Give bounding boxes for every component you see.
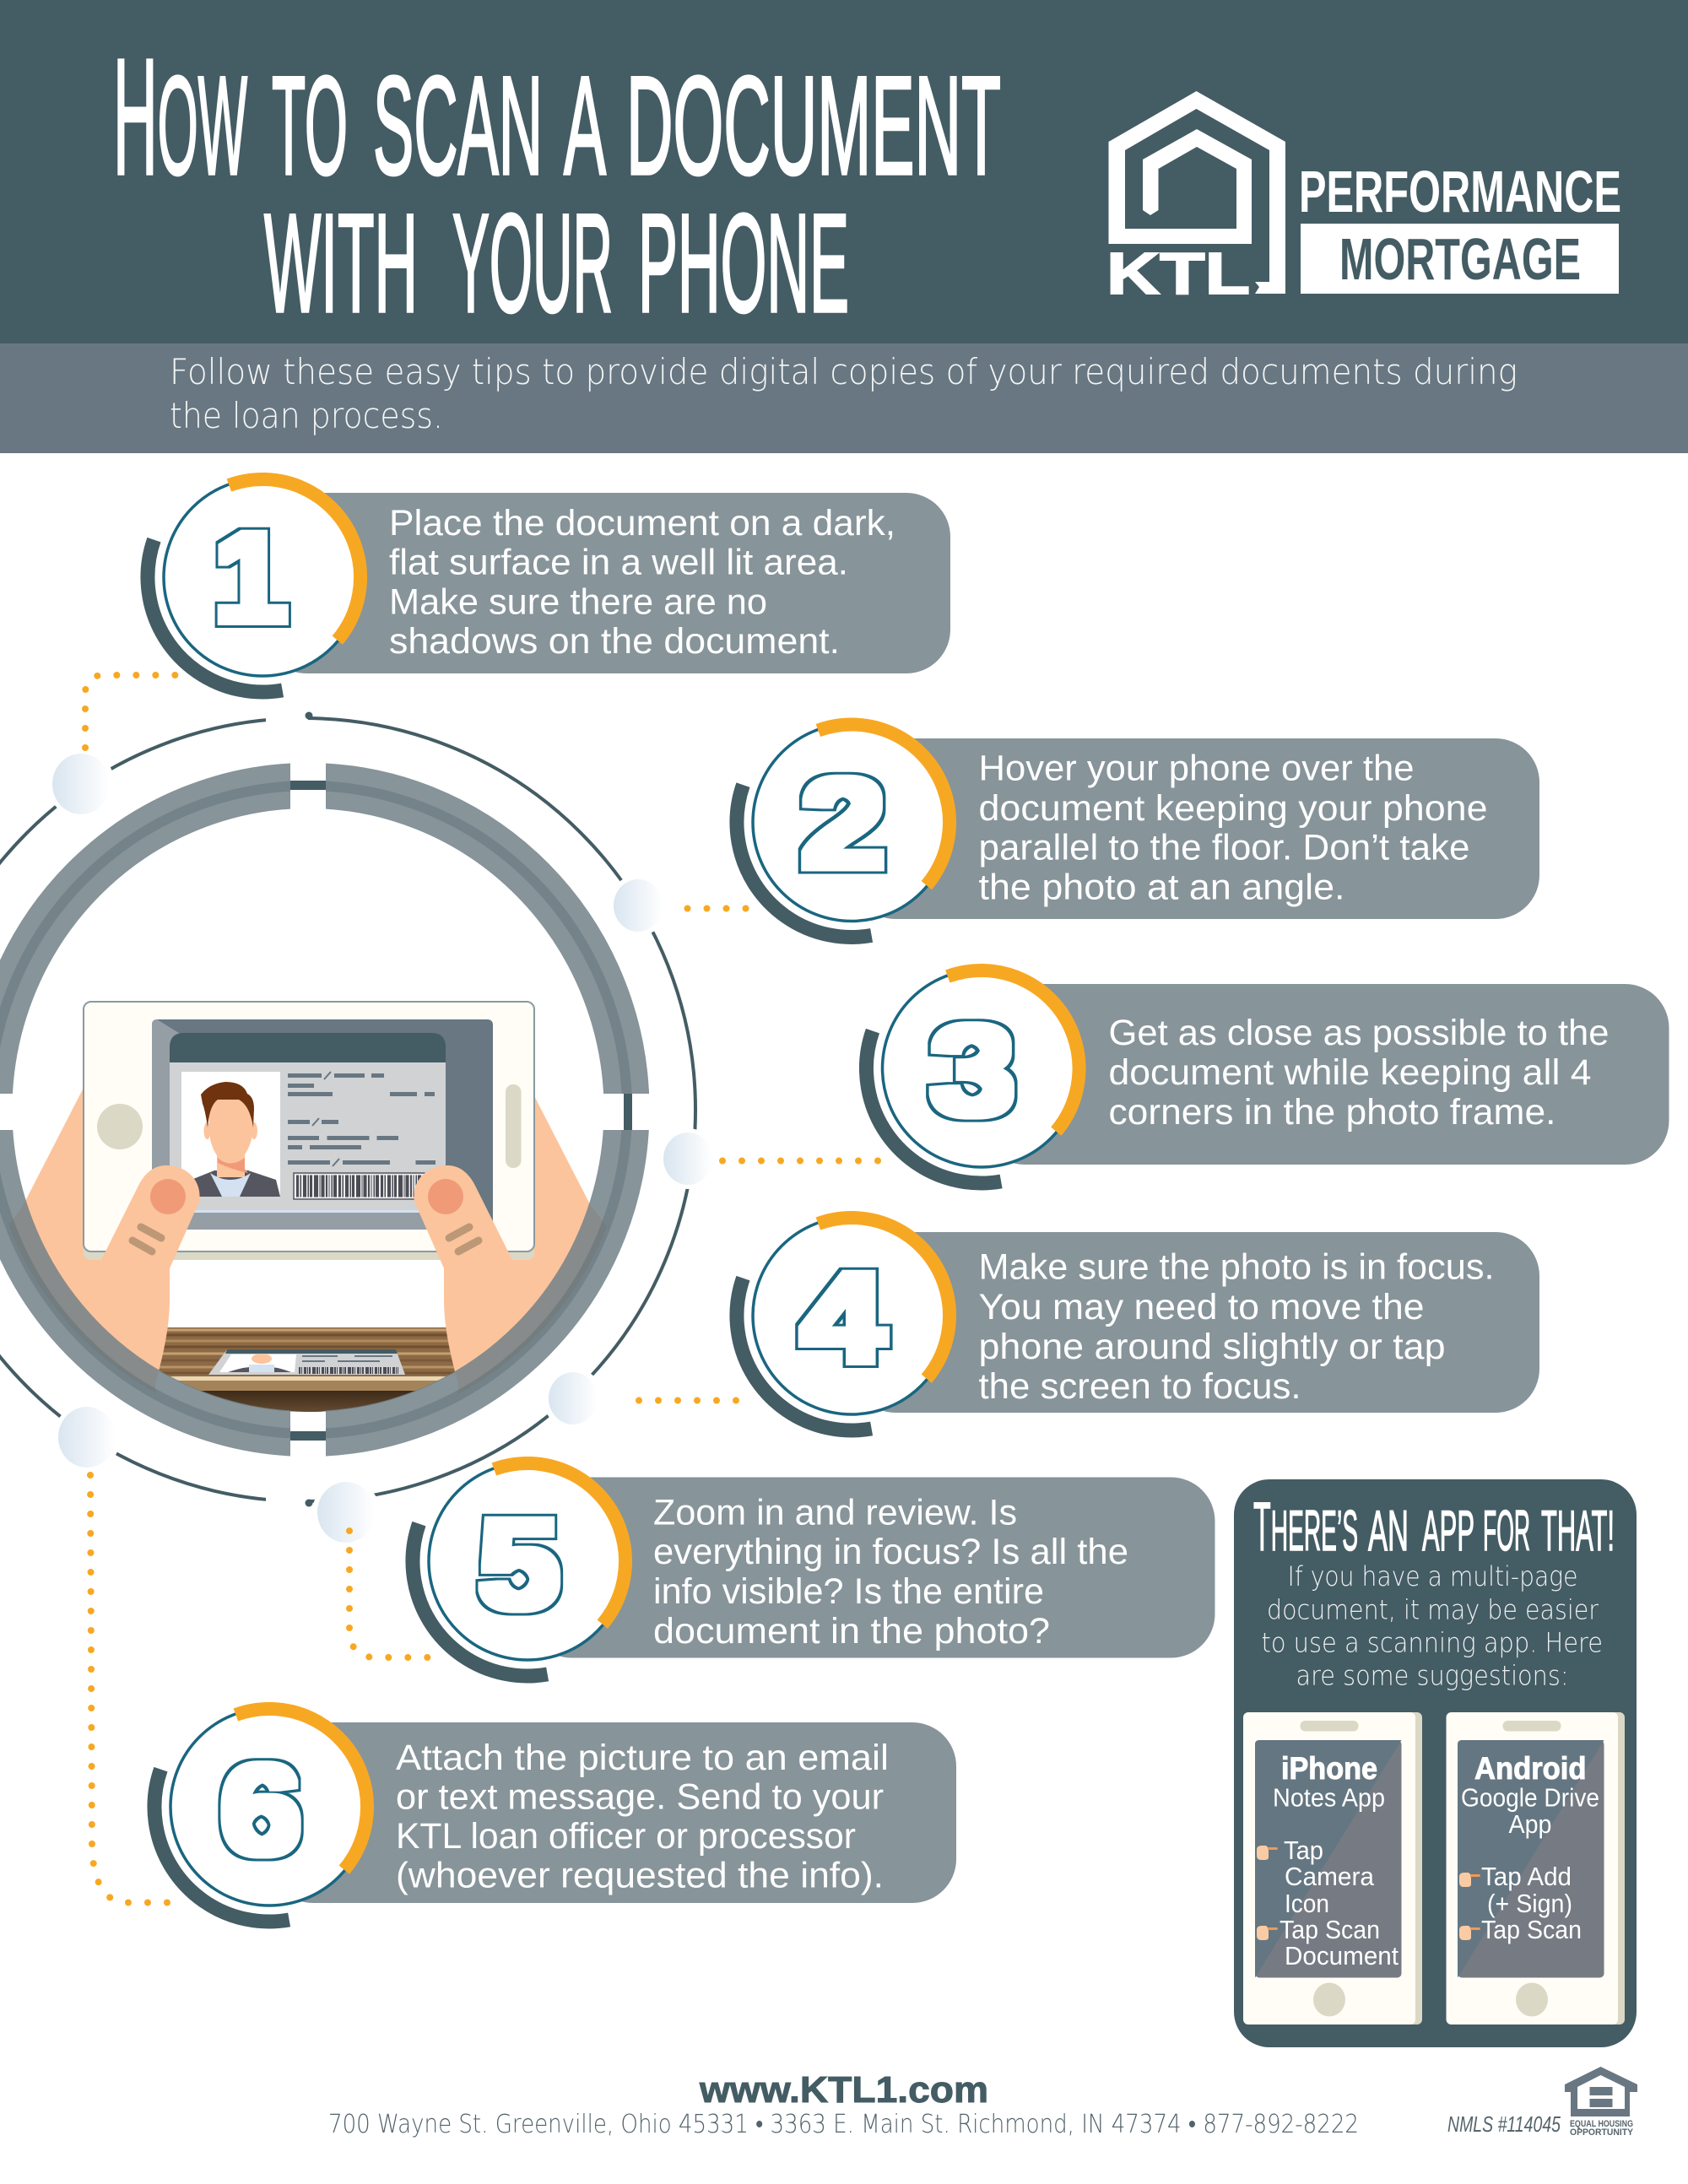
panel intro text: If you have a multi-page [1288,1560,1578,1592]
step 5 badge: 5 [479,1494,560,1635]
step 5 text: info visible? Is the entire [653,1571,1044,1612]
panel intro text: document, it may be easier [1267,1593,1599,1625]
step 6 text: (whoever requested the info). [396,1855,884,1895]
ID text bars [288,1072,436,1166]
step 3 text: corners in the photo frame. [1109,1092,1556,1133]
Android steps: (+ Sign) [1487,1889,1572,1918]
logo box: Mortgage [1301,224,1619,294]
logo text: KTL: KTL [1106,241,1250,306]
ID card [170,1033,446,1213]
step 6 text: KTL loan officer or processor [396,1816,856,1857]
header band [0,0,1688,343]
right hand thumb [414,1165,588,1394]
step 4 text: the screen to focus. [979,1366,1301,1407]
step 3 badge [848,935,1114,1202]
title: WITH [264,186,418,342]
iPhone steps: Document [1285,1941,1399,1970]
iPhone steps [1273,1782,1399,1970]
step 5 text: document in the photo? [653,1611,1050,1652]
panel: app suggestions [1234,1479,1637,2047]
step 1 badge [129,444,396,711]
step 4 bubble [852,1232,1539,1413]
icon: equal housing opportunity [1565,2067,1637,2138]
step 3 text: document while keeping all 4 [1109,1052,1592,1093]
icon: pointing hand [1257,1926,1278,1940]
icon: equal housing opportunity: OPPORTUNITY [1570,2127,1634,2138]
intro text: Follow these easy tips to provide digital copies of your required documents during [170,351,1518,392]
step 4 [718,1182,1539,1449]
step 3 badge: 3 [930,1000,1015,1142]
left hand thumb [28,1165,200,1392]
step 2 [718,689,1539,955]
iPhone card [1243,1712,1422,2025]
step 4 badge [718,1182,985,1449]
step 4 text [979,1247,1494,1407]
step 5 [394,1428,1215,1695]
icon: house mark [1109,91,1285,294]
footer address: 700 Wayne St. Greenville, Ohio 45331 • 3363 E. Main St. Richmond, IN 47374 • 877-892-8222 [328,2110,1359,2139]
step 6 text [396,1738,889,1895]
wooden table with document [159,1327,455,1412]
connector nodes [47,750,718,1546]
thumbnail [150,1179,186,1214]
panel heading: THERE’S [1253,1489,1358,1565]
ID photo [181,1072,280,1197]
thumbnail [428,1179,463,1214]
step 5 text: everything in focus? Is all the [653,1532,1128,1572]
thick broken ring [0,781,632,1441]
phone held sideways [84,1002,534,1260]
iPhone steps: Camera [1285,1862,1375,1891]
central illustration: phone scanning an ID [0,675,879,1902]
step 5 badge [394,1428,661,1695]
panel intro text: to use a scanning app. Here [1261,1627,1603,1659]
step 5 text [653,1492,1128,1652]
Android steps: Tap Add [1481,1862,1572,1891]
intro text: the loan process. [170,395,443,436]
Android steps: Google Drive [1461,1782,1599,1813]
outer thin ring [0,705,695,1515]
title: A [564,48,606,204]
step 2 badge [718,689,985,955]
speaker [506,1084,522,1168]
title: YOUR [452,186,613,342]
step 6 [136,1673,956,1940]
step 1 text [389,503,895,662]
panel heading [1253,1489,1615,1565]
title: PHONE [638,186,849,342]
step 4 text: You may need to move the [979,1287,1425,1327]
step 1 text: Make sure there are no [389,582,767,623]
step 3 [848,935,1669,1202]
iPhone steps: Icon [1285,1889,1329,1918]
logo: KTL Performance Mortgage [1106,91,1621,306]
panel intro text [1261,1560,1603,1691]
small document on table [208,1349,405,1375]
step 1 bubble [262,493,950,673]
Android steps: Tap Scan [1481,1915,1582,1944]
hands behind phone [8,1089,607,1260]
step 6 badge: 6 [220,1739,301,1880]
text: DOCUMENT [626,48,1001,204]
step 2 bubble [852,738,1539,919]
step 6 bubble [269,1722,956,1903]
icon: equal housing opportunity: EQUAL HOUSING [1570,2119,1633,2129]
title: HOW [113,24,247,209]
title [113,24,1001,342]
step 6 text: Attach the picture to an email [396,1738,889,1778]
intro text [170,351,1518,436]
footer website: www.KTL1.com [699,2069,988,2111]
panel intro text: are some suggestions: [1296,1659,1568,1691]
iPhone steps: Notes App [1273,1782,1385,1813]
intro band [0,343,1688,453]
Android card [1447,1712,1625,2025]
step 4 text: phone around slightly or tap [979,1327,1445,1367]
Android steps: App [1509,1809,1551,1839]
home button [97,1104,143,1149]
step 1 badge: 1 [214,506,288,648]
step 1 text: flat surface in a well lit area. [389,542,848,582]
icon: pointing hand [1459,1873,1480,1887]
title: TO [272,48,348,204]
icon: pointing hand [1459,1926,1480,1940]
step 1 [129,444,950,711]
step 2 badge: 2 [801,754,885,895]
barcode [294,1173,425,1199]
step 6 text: or text message. Send to your [396,1777,884,1818]
iPhone steps: Tap Scan [1280,1915,1380,1944]
step 3 text [1109,1013,1609,1133]
Android heading: Android [1474,1751,1587,1786]
step 2 text [979,748,1487,908]
icon: pointing hand [1257,1846,1278,1860]
footer NMLS: NMLS #114045 [1447,2111,1561,2137]
iPhone heading: iPhone [1281,1751,1377,1786]
step 4 badge: 4 [801,1247,885,1389]
step 2 text: the photo at an angle. [979,868,1345,908]
step 2 text: Hover your phone over the [979,748,1415,788]
dotted connectors [85,675,879,1902]
step 1 text: shadows on the document. [389,621,840,662]
panel heading: AN [1368,1499,1409,1563]
step 2 text: document keeping your phone [979,788,1487,829]
logo box: Mortgage: MORTGAGE [1339,226,1581,292]
step 5 bubble [528,1477,1215,1657]
iPhone steps: Tap [1284,1835,1323,1865]
step 5 text: Zoom in and review. Is [653,1492,1017,1533]
panel heading: FOR [1483,1499,1530,1563]
step 3 text: Get as close as possible to the [1109,1013,1609,1053]
step 3 bubble [981,984,1669,1165]
Android steps [1461,1782,1599,1944]
step 1 text: Place the document on a dark, [389,503,895,543]
step 4 text: Make sure the photo is in focus. [979,1247,1494,1288]
step 6 badge [136,1673,403,1940]
step 2 text: parallel to the floor. Don’t take [979,827,1470,868]
phone screen [152,1019,493,1230]
title: SCAN [373,48,543,204]
panel heading: APP [1422,1499,1474,1563]
